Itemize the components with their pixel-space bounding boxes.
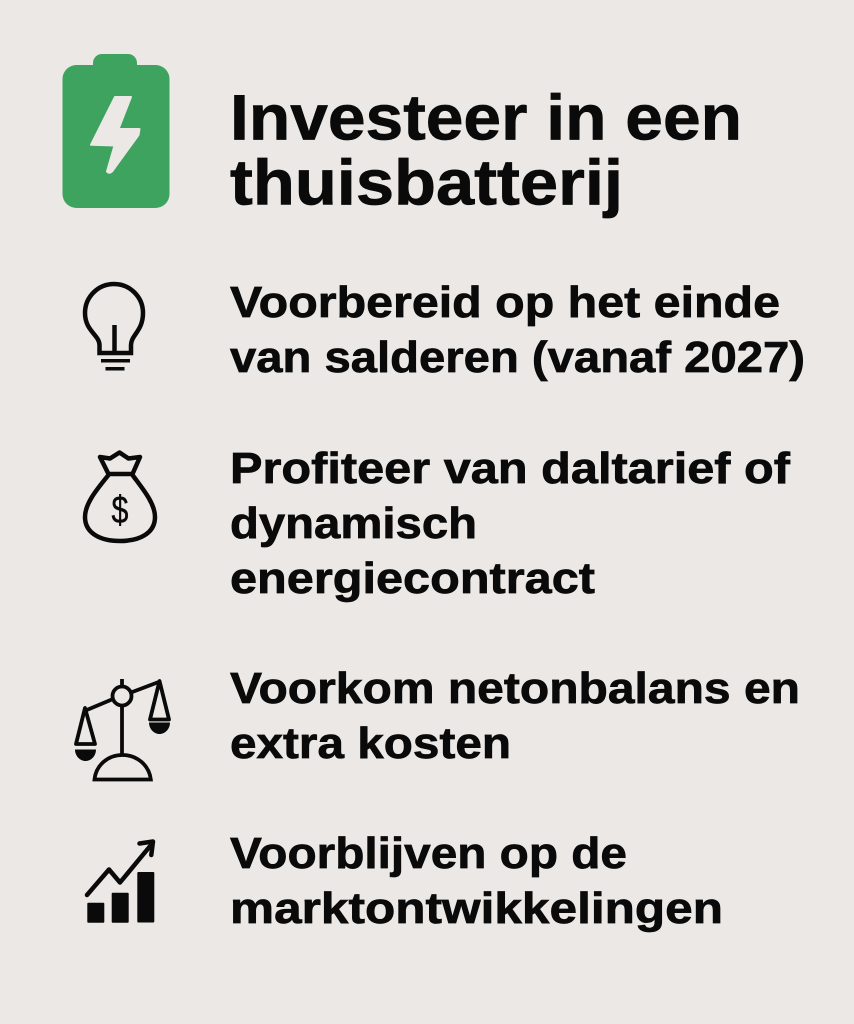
benefit 1 text <box>230 279 805 382</box>
benefit 2 text <box>230 445 791 603</box>
benefit 3 text <box>230 665 800 768</box>
icon: rising bar chart <box>87 842 154 923</box>
title <box>230 82 742 218</box>
benefit 4 text <box>230 830 723 933</box>
icon: money bag <box>85 452 155 541</box>
benefit 3 text: extra kosten <box>230 720 511 768</box>
benefit 4 text: Voorblijven op de <box>230 830 627 878</box>
title: Investeer in een <box>230 82 742 154</box>
benefit 2 text: Profiteer van daltarief of <box>230 445 791 493</box>
benefit 2 text: dynamisch <box>230 500 477 548</box>
title: thuisbatterij <box>230 146 623 218</box>
benefit 1 text: Voorbereid op het einde <box>230 279 780 327</box>
benefit 2 text: energiecontract <box>230 555 595 603</box>
icon: balance scales <box>75 679 170 780</box>
benefit 4 text: marktontwikkelingen <box>230 885 723 933</box>
benefit 3 text: Voorkom netonbalans en <box>230 665 800 713</box>
icon: light bulb <box>85 284 143 369</box>
icon: battery with lightning bolt <box>62 54 170 208</box>
benefit 1 text: van salderen (vanaf 2027) <box>230 334 805 382</box>
icon: money bag: $ <box>112 488 128 532</box>
